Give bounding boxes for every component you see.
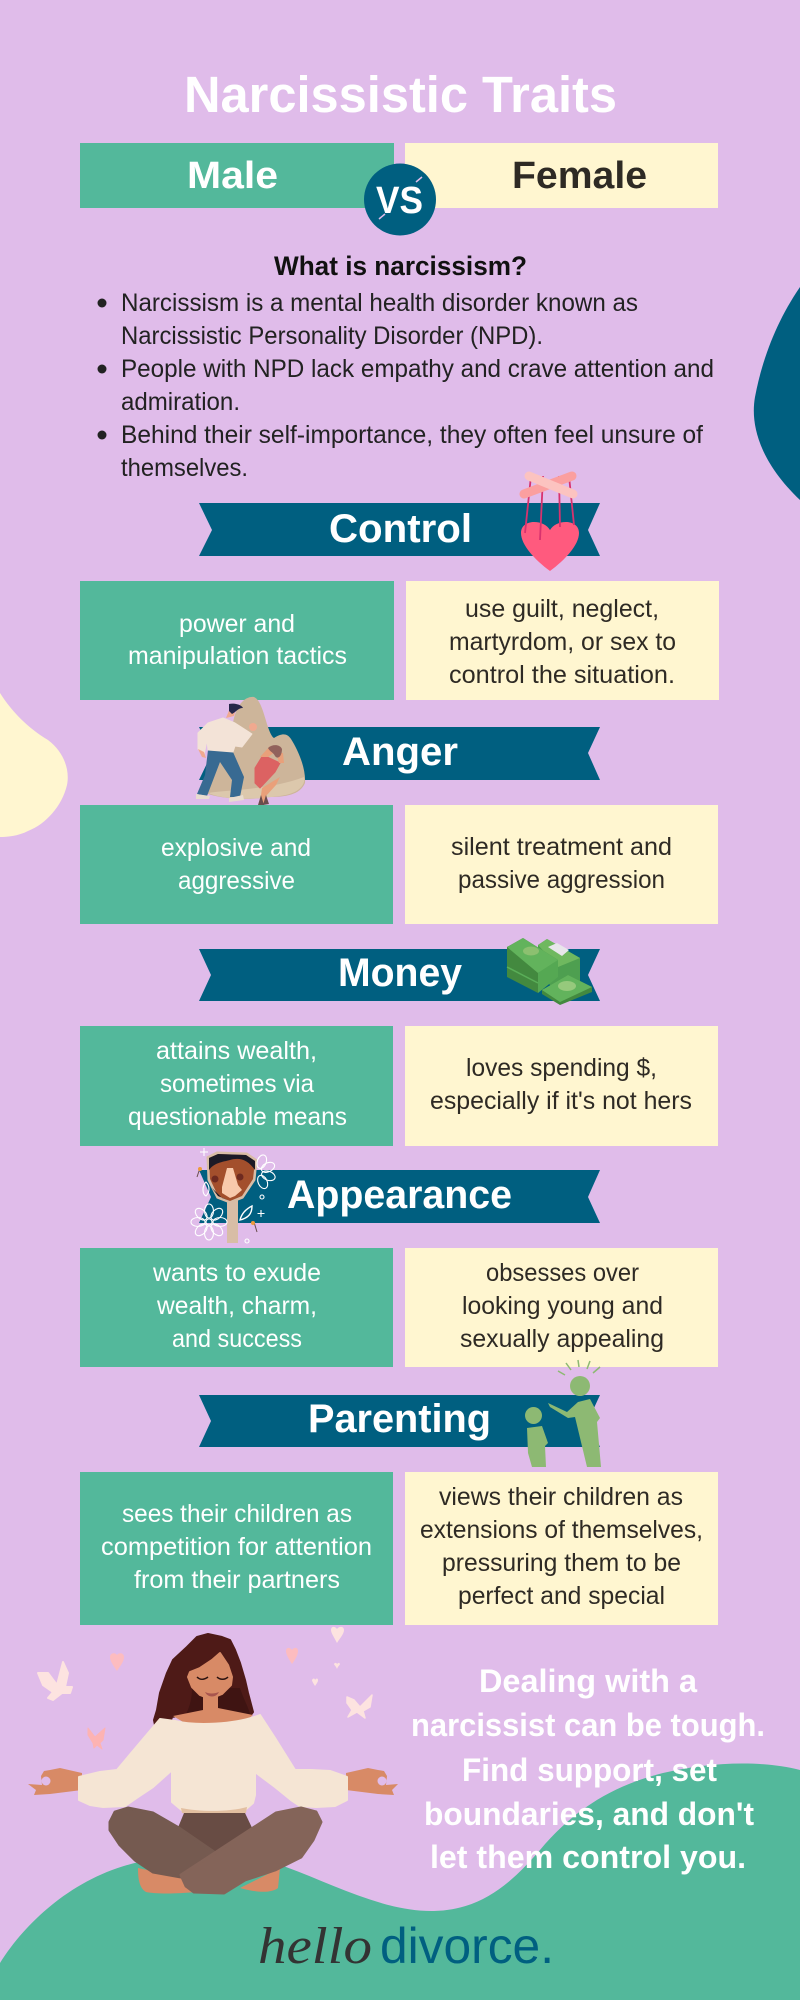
male money box: questionable means [128,1103,347,1131]
blob: blue right [754,287,800,500]
male parenting box: competition for attention [101,1533,372,1561]
female money box: loves spending $, [466,1054,657,1082]
bullet list [98,289,714,482]
panel: parenting [80,1360,718,1625]
female appearance box: sexually appealing [460,1325,664,1353]
closing message: narcissist can be tough. [411,1707,765,1743]
ribbon: appearance [199,1170,600,1223]
ribbon: appearance: Appearance [287,1173,512,1217]
title: Narcissistic Traits [184,66,617,123]
closing message: boundaries, and don't [424,1796,754,1832]
male money box [80,1026,393,1146]
male appearance box: and success [172,1325,302,1353]
shoulders and face [173,1653,253,1726]
panel: control [80,476,719,700]
blob: cream left [0,693,68,837]
male appearance box [80,1248,393,1367]
icon: parent pointing at child [525,1360,601,1467]
male anger box: explosive and [161,834,311,862]
bullet list: Behind their self-importance, they often feel unsure of [121,421,703,449]
logo: hello divorce: hello [258,1918,372,1975]
closing message: Dealing with a [479,1663,697,1699]
male anger box [80,805,393,924]
illustration: meditating woman [28,1634,398,1894]
female money box: especially if it's not hers [430,1087,692,1115]
seated woman [255,755,280,788]
ribbon: money: Money [338,951,463,995]
sweater [198,718,252,755]
male header [80,143,394,208]
male appearance box: wealth, charm, [156,1292,317,1320]
panel: money [80,938,718,1146]
icon: cash stacks [507,938,592,1005]
logo: hello divorce [258,1918,554,1975]
left leg [110,1808,214,1877]
male money box: attains wealth, [156,1037,317,1065]
panel: appearance [80,1148,718,1367]
female money box [405,1026,718,1146]
female header [405,143,718,208]
male parenting box: sees their children as [122,1500,352,1528]
closing message: let them control you. [430,1839,746,1875]
bullet list: themselves. [121,454,248,482]
male anger box: aggressive [178,867,295,895]
female appearance box: obsesses over [486,1259,639,1287]
male control box: power and [179,610,295,638]
ribbon: anger: Anger [342,730,458,774]
ribbon: parenting [199,1395,600,1447]
pelvis [177,1813,254,1854]
female anger box [405,805,718,924]
female anger box: silent treatment and [451,833,672,861]
right leg [181,1808,321,1893]
green hill [0,1764,800,2000]
female parenting box [405,1472,718,1625]
bullet list: Narcissism is a mental health disorder known as [121,289,638,317]
female appearance box: looking young and [462,1292,663,1320]
female parenting box: perfect and special [458,1582,665,1610]
panel: anger [80,697,718,924]
female control box [406,581,719,700]
illustration: arguing couple [196,697,305,805]
sweater [79,1715,347,1812]
icon: puppet heart [521,476,579,571]
bullet list: Narcissistic Personality Disorder (NPD). [121,322,543,350]
waistband [181,1807,247,1814]
ribbon: money [199,949,600,1001]
decorations: butterflies and hearts [38,1627,372,1749]
male control box: manipulation tactics [128,642,347,670]
bullet list: People with NPD lack empathy and crave attention and [121,355,714,383]
jeans [197,750,244,797]
header: male vs female [80,143,718,236]
male appearance box: wants to exude [152,1259,321,1287]
hands [28,1768,398,1795]
ribbon: control [199,503,600,556]
female header: Female [512,155,647,197]
female parenting box: views their children as [439,1483,683,1511]
female control box: control the situation. [449,661,675,689]
female parenting box: pressuring them to be [442,1549,681,1577]
hair back [154,1634,253,1725]
male parenting box [80,1472,393,1625]
vs badge [364,164,436,236]
male money box: sometimes via [160,1070,314,1098]
illustration: hand mirror [191,1148,276,1243]
bullet list: admiration. [121,388,240,416]
female appearance box [405,1248,718,1367]
male parenting box: from their partners [134,1566,340,1594]
feet [138,1868,196,1894]
heading: what is narcissism: What is narcissism? [274,251,527,281]
logo: hello divorce: divorce. [380,1918,554,1974]
ribbon: control: Control [329,507,472,551]
male header: Male [187,155,278,197]
closing message: Find support, set [462,1752,717,1788]
closing message [411,1663,765,1875]
ribbon: parenting: Parenting [308,1397,491,1441]
vs badge: VS [376,180,423,222]
ribbon: anger [199,727,600,780]
female parenting box: extensions of themselves, [420,1516,703,1544]
female anger box: passive aggression [458,866,665,894]
male control box [80,581,394,700]
female control box: martyrdom, or sex to [449,628,676,656]
female control box: use guilt, neglect, [465,595,659,623]
